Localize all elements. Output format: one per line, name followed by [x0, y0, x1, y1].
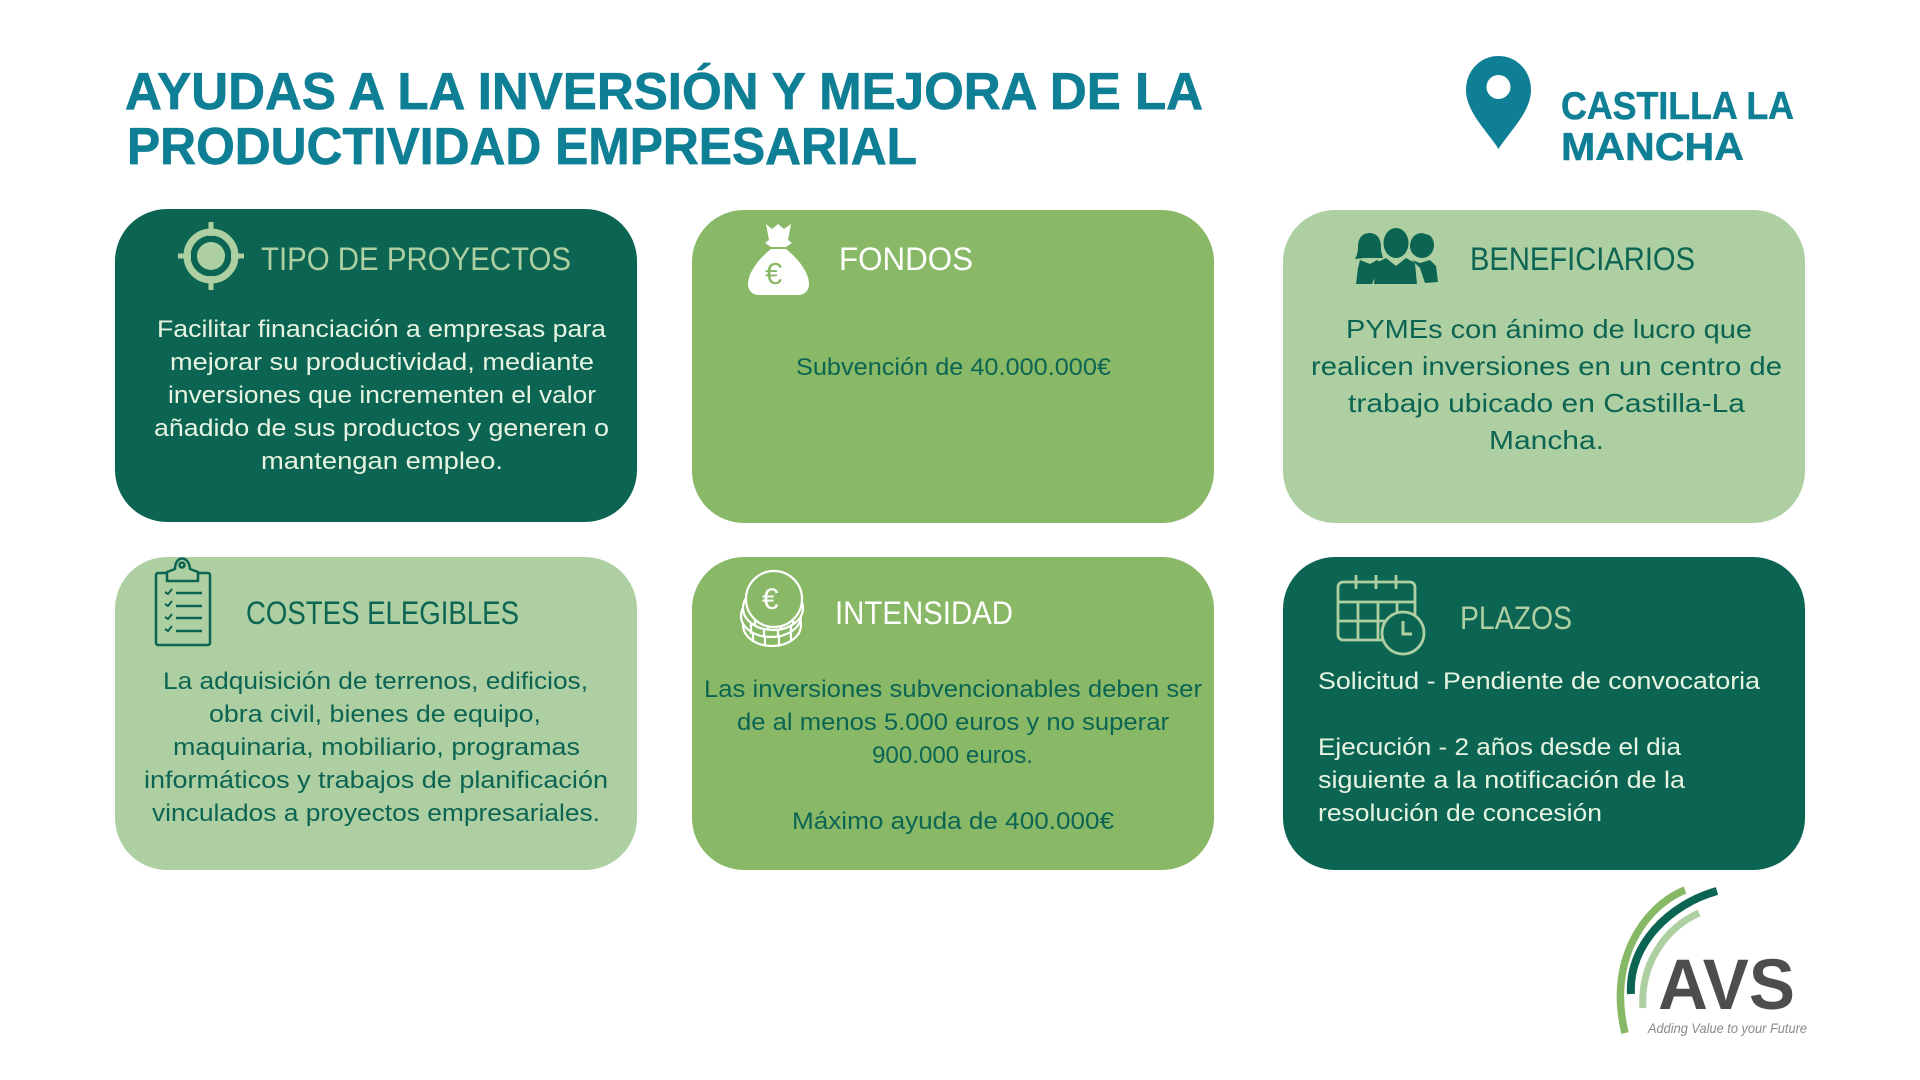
heading: BENEFICIARIOS	[1470, 241, 1695, 277]
panel: intensidad	[692, 557, 1214, 870]
body text: La adquisición de terrenos, edificios,	[163, 668, 588, 695]
body text	[144, 668, 608, 827]
panel: costes elegibles	[115, 557, 637, 870]
icon: coins	[741, 571, 803, 646]
region label	[1561, 85, 1794, 169]
body text: PYMEs con ánimo de lucro que	[1346, 314, 1752, 344]
body text: obra civil, bienes de equipo,	[209, 701, 541, 728]
body text: Facilitar financiación a empresas para	[157, 316, 607, 343]
body text: añadido de sus productos y generen o	[154, 415, 609, 442]
body text	[704, 676, 1202, 835]
icon: coins: €	[762, 583, 779, 616]
body text: siguiente a la notificación de la	[1318, 767, 1686, 794]
logo: AVS: Adding Value to your Future	[1647, 1020, 1807, 1036]
body text: Las inversiones subvencionables deben ser	[704, 676, 1202, 703]
panel: tipo de proyectos	[115, 209, 637, 522]
body text: Subvención de 40.000.000€	[796, 354, 1112, 381]
heading: FONDOS	[839, 241, 973, 277]
body text: 900.000 euros.	[872, 742, 1033, 769]
heading: COSTES ELEGIBLES	[246, 595, 519, 631]
panel: beneficiarios	[1283, 210, 1805, 523]
body text	[1311, 314, 1782, 455]
title: AYUDAS A LA INVERSIÓN Y MEJORA DE LA	[125, 63, 1203, 121]
title	[125, 63, 1203, 176]
logo: AVS: AVS	[1658, 946, 1795, 1025]
body text: de al menos 5.000 euros y no superar	[737, 709, 1169, 736]
icon: people	[1355, 228, 1438, 284]
body text: informáticos y trabajos de planificación	[144, 767, 608, 794]
body text	[154, 316, 609, 475]
icon: location pin	[1466, 56, 1531, 149]
body text	[1318, 668, 1761, 827]
heading: INTENSIDAD	[835, 595, 1013, 631]
body text: trabajo ubicado en Castilla-La	[1348, 388, 1746, 418]
body text: vinculados a proyectos empresariales.	[152, 800, 600, 827]
heading: TIPO DE PROYECTOS	[261, 241, 571, 277]
body text: Máximo ayuda de 400.000€	[792, 808, 1115, 835]
logo: AVS	[1620, 890, 1807, 1036]
icon: target	[178, 222, 244, 290]
icon: calendar with clock	[1338, 575, 1424, 654]
body text: Solicitud - Pendiente de convocatoria	[1318, 668, 1761, 695]
icon: money bag: €	[765, 256, 782, 291]
icon: clipboard	[156, 558, 210, 645]
panel: fondos	[692, 210, 1214, 523]
region label: CASTILLA LA	[1561, 85, 1794, 128]
body text: realicen inversiones en un centro de	[1311, 351, 1782, 381]
heading: PLAZOS	[1460, 600, 1572, 636]
icon: money bag	[748, 224, 809, 295]
body text: Ejecución - 2 años desde el dia	[1318, 734, 1682, 761]
body text: mejorar su productividad, mediante	[170, 349, 594, 376]
region label: MANCHA	[1561, 126, 1744, 169]
body text: resolución de concesión	[1318, 800, 1602, 827]
body text: Mancha.	[1489, 425, 1604, 455]
body text: inversiones que incrementen el valor	[168, 382, 596, 409]
body text: mantengan empleo.	[261, 448, 503, 475]
panel: plazos	[1283, 557, 1805, 870]
body text: maquinaria, mobiliario, programas	[173, 734, 580, 761]
title: PRODUCTIVIDAD EMPRESARIAL	[127, 118, 917, 176]
